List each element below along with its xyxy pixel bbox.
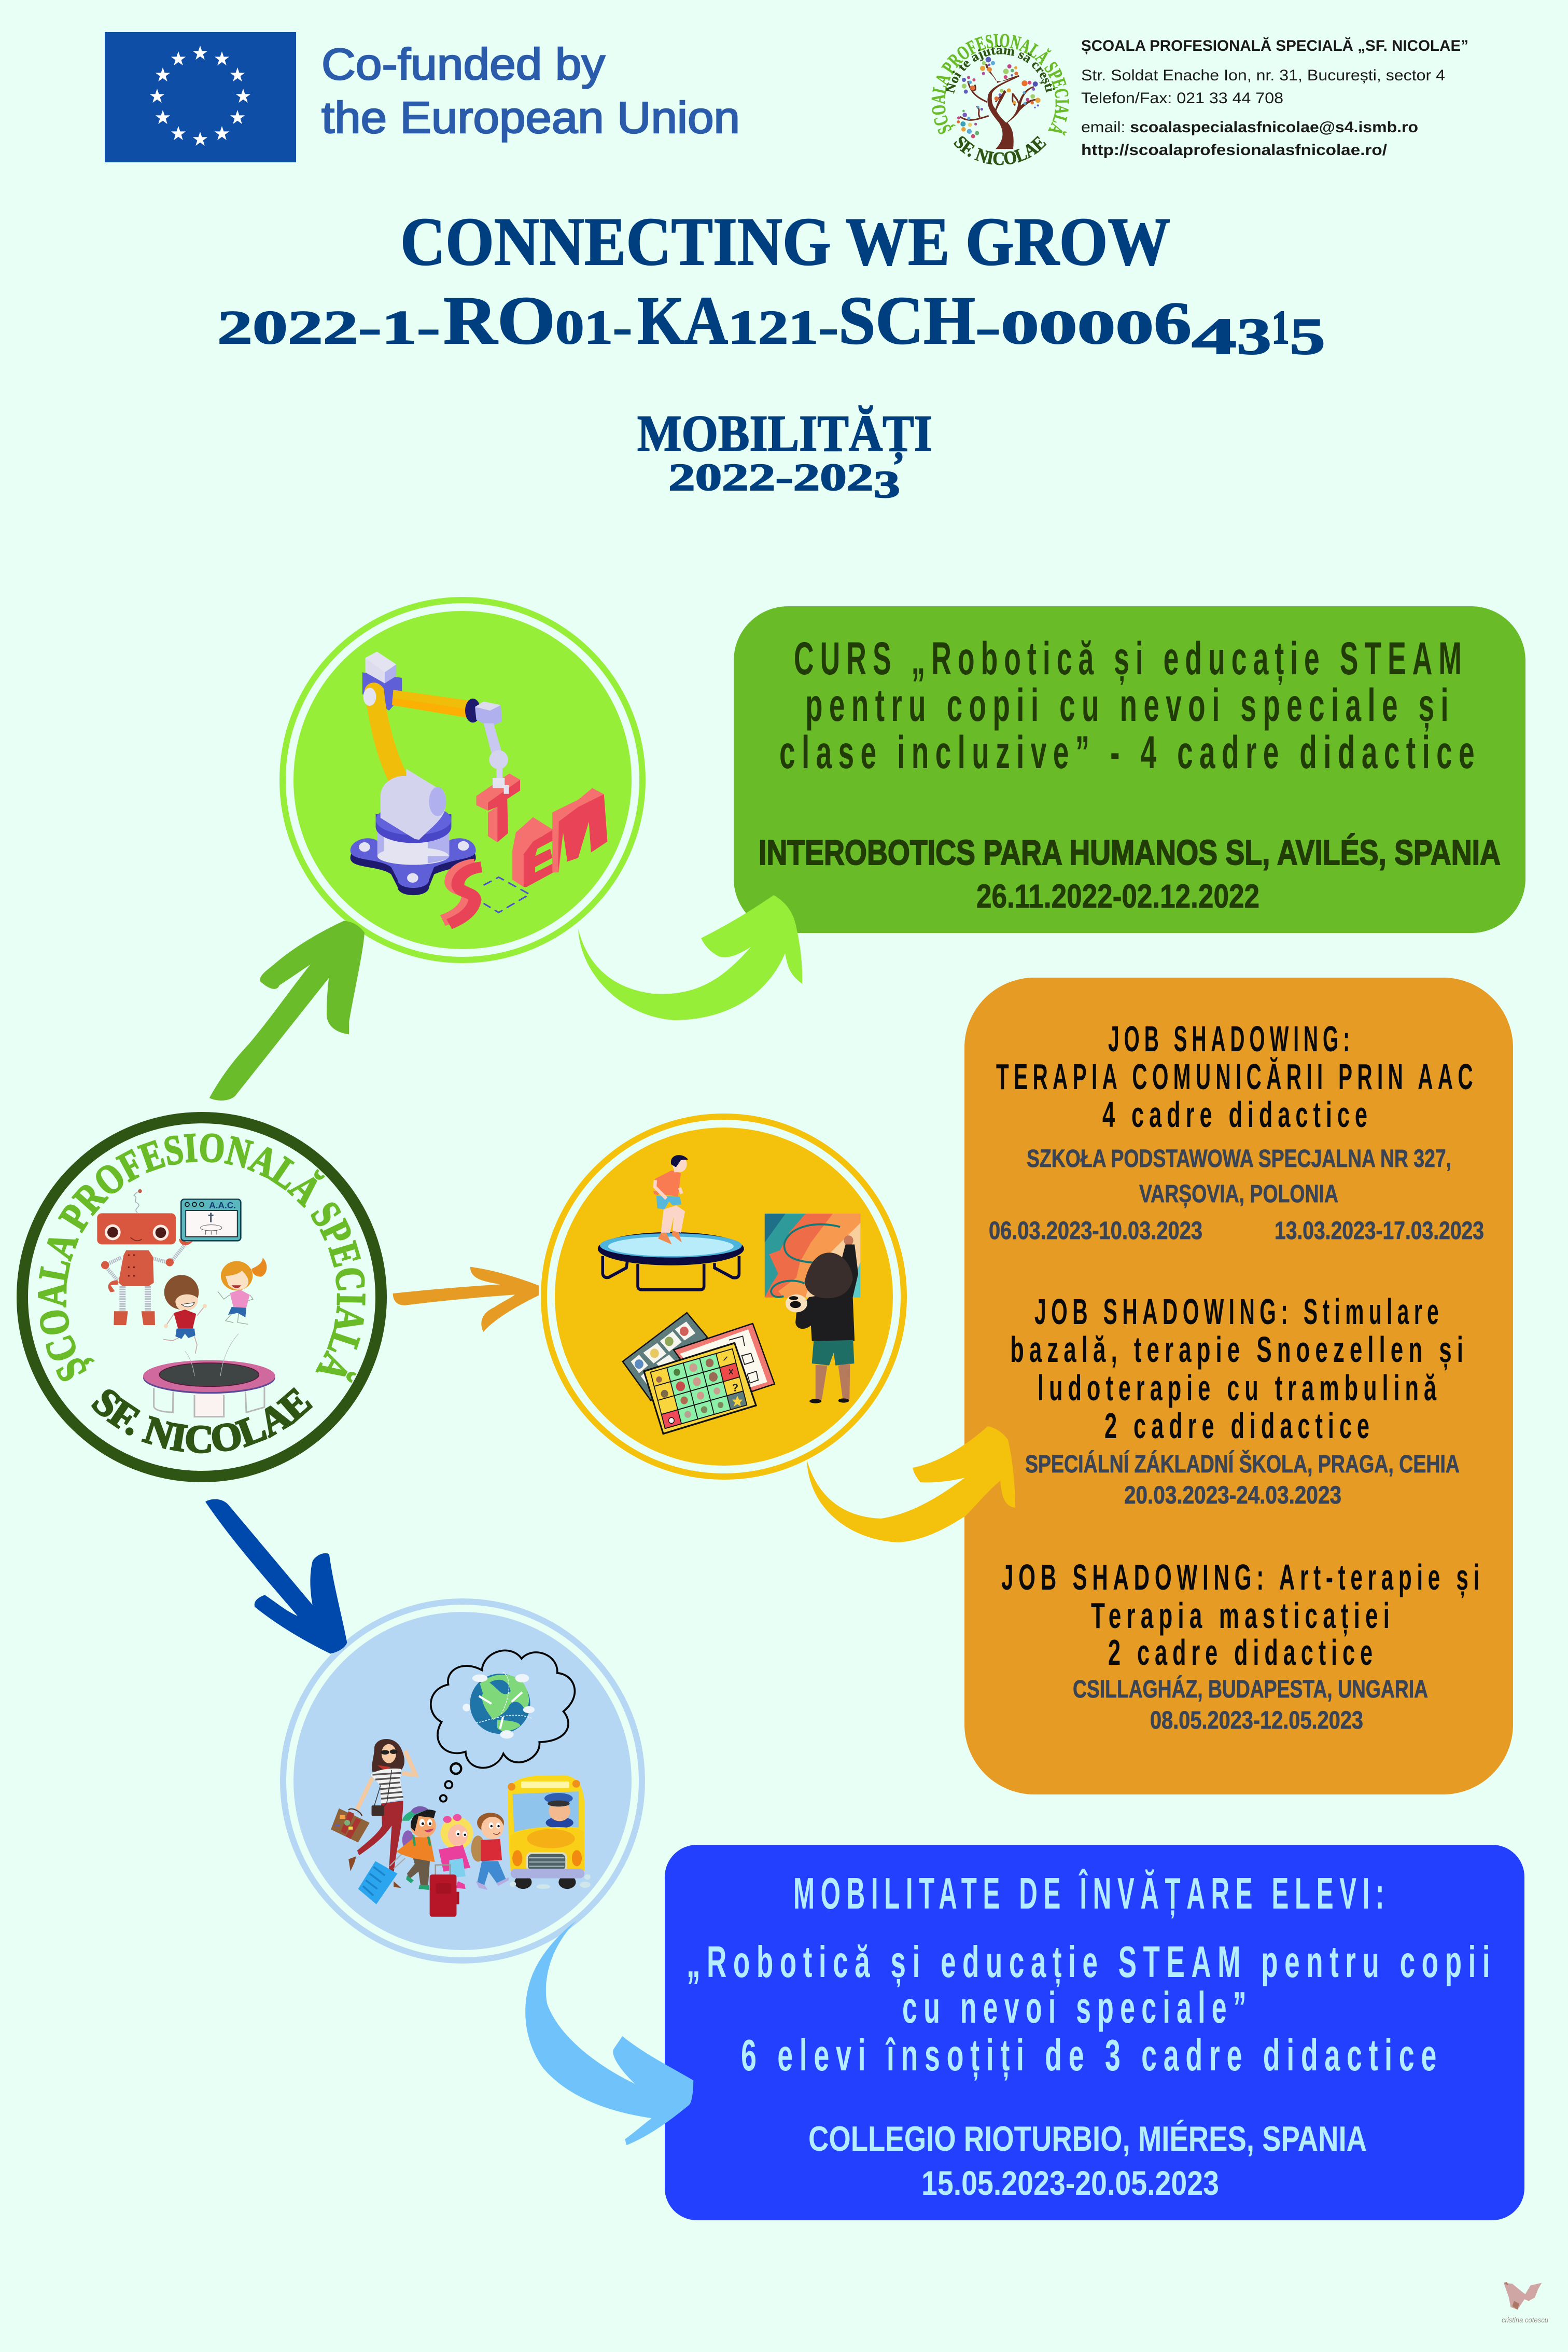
arrow: travel circle to student panel xyxy=(525,1920,693,2145)
job shadowing 1: VARȘOVIA, POLONIA xyxy=(1139,1180,1338,1208)
blue suitcase xyxy=(390,1855,405,1869)
boy with cap xyxy=(407,1857,430,1885)
emblem text: school name: ȘCOALA PROFESIONALĂ SPECIALĂ xyxy=(37,1133,366,1383)
job shadowing 1: 13.03.2023-17.03.2023 xyxy=(1275,1217,1484,1245)
title: -0000 xyxy=(975,301,1154,354)
title: 5 xyxy=(1290,308,1325,365)
job shadowing 1: JOB SHADOWING: xyxy=(1108,1019,1354,1059)
designer mark xyxy=(1502,2282,1548,2324)
icon: robot arm and STEM letters xyxy=(351,651,607,924)
course host and dates xyxy=(759,833,1501,915)
job shadowing 1 xyxy=(989,1019,1484,1245)
title xyxy=(217,203,1325,365)
EU co-funding text: Co-funded by xyxy=(321,40,606,89)
job shadowing 3: 2 cadre didactice xyxy=(1108,1632,1378,1673)
job shadowing 3 xyxy=(1001,1557,1485,1734)
panel: robotics course xyxy=(734,606,1525,933)
school bus xyxy=(514,1875,532,1889)
panel: student mobility xyxy=(665,1845,1524,2220)
job shadowing 3: 08.05.2023-12.05.2023 xyxy=(1150,1707,1363,1734)
arrow: emblem to job shadowing circle xyxy=(393,1267,539,1332)
course description xyxy=(779,632,1481,778)
student mobility description: cu nevoi speciale” xyxy=(902,1983,1253,2033)
title: 4 xyxy=(1192,308,1237,365)
AAC boards xyxy=(623,1313,707,1400)
school contact details: email: scoalaspecialasfnicolae@s4.ismb.ro xyxy=(1081,119,1418,136)
icon: robot, children and trampoline: A.A.C. xyxy=(209,1200,236,1210)
icon: butterfly xyxy=(1504,2282,1542,2309)
icon: robot, children and trampoline xyxy=(97,1189,275,1417)
girl xyxy=(218,1291,253,1324)
icon: travellers and school bus xyxy=(331,1650,591,1917)
job shadowing 2: 2 cadre didactice xyxy=(1104,1405,1375,1446)
circle: STEM robot xyxy=(283,600,642,960)
title: RO xyxy=(443,282,555,358)
school contact details: Str. Soldat Enache Ion, nr. 31, București, sector 4 xyxy=(1081,67,1445,84)
EU flag xyxy=(105,32,296,162)
red suitcase xyxy=(436,1865,450,1874)
arrow: emblem to STEM xyxy=(209,921,365,1101)
title: 121- xyxy=(728,301,838,354)
job shadowing 1: 06.03.2023-10.03.2023 xyxy=(989,1217,1202,1245)
school contact details: ȘCOALA PROFESIONALĂ SPECIALĂ „SF. NICOLAE” xyxy=(1081,37,1468,54)
job shadowing 1: SZKOŁA PODSTAWOWA SPECJALNA NR 327, xyxy=(1027,1145,1451,1173)
title: 2022-1- xyxy=(217,301,440,354)
emblem text: SF. NICOLAE: SF. NICOLAE xyxy=(91,1387,313,1453)
school contact details: http://scoalaprofesionalasfnicolae.ro/ xyxy=(1081,142,1388,159)
icon: trampoline, painter and AAC boards xyxy=(598,1155,860,1434)
boy xyxy=(163,1306,205,1354)
school contact details: Telefon/Fax: 021 33 44 708 xyxy=(1081,90,1283,107)
heading: mobilities xyxy=(637,405,932,506)
title: 01- xyxy=(555,301,632,354)
circle: job shadowing themes xyxy=(544,1117,904,1477)
student mobility host and dates: COLLEGIO RIOTURBIO, MIÉRES, SPANIA xyxy=(808,2119,1367,2159)
trampoline xyxy=(603,1256,739,1290)
robot xyxy=(134,1191,140,1213)
circle: student travel xyxy=(283,1602,642,1960)
job shadowing 1: 4 cadre didactice xyxy=(1102,1094,1373,1135)
icon: trampoline, painter and AAC boards: ? xyxy=(732,1382,738,1394)
student mobility host and dates xyxy=(808,2119,1367,2202)
boy with backpack xyxy=(477,1861,507,1887)
icon: tree with hands xyxy=(957,57,1041,149)
student mobility host and dates: 15.05.2023-20.05.2023 xyxy=(921,2164,1219,2202)
course host and dates: 26.11.2022-02.12.2022 xyxy=(976,878,1259,915)
EU logo xyxy=(105,32,740,162)
trampoline xyxy=(194,1394,224,1417)
jumping boy xyxy=(658,1230,682,1244)
painting xyxy=(765,1214,860,1298)
panel: job shadowing xyxy=(964,978,1513,1794)
job shadowing 2: SPECIÁLNÍ ZÁKLADNÍ ŠKOLA, PRAGA, CEHIA xyxy=(1025,1450,1460,1478)
globe xyxy=(470,1674,530,1734)
EU co-funding text xyxy=(321,40,740,143)
title: KA xyxy=(637,282,728,358)
arrow: emblem to travel circle xyxy=(205,1499,347,1654)
title: 6 xyxy=(1154,290,1192,357)
school logo small: ȘCOALA PROFESIONALĂ SPECIALĂ xyxy=(931,34,1069,136)
job shadowing 2 xyxy=(1010,1291,1468,1509)
girl with bow xyxy=(456,1881,466,1889)
job shadowing 3: Terapia masticației xyxy=(1091,1595,1395,1636)
heading: mobilities: 2022-202 xyxy=(668,456,816,499)
painter xyxy=(844,1235,853,1246)
arrow: STEM to course panel xyxy=(578,895,802,1020)
thought cloud xyxy=(431,1650,575,1768)
circle: school emblem xyxy=(17,1112,387,1482)
school logo small: SF. NICOLAE xyxy=(954,136,1046,165)
arrow: job shadowing circle to panel xyxy=(807,1426,1015,1542)
student mobility description xyxy=(687,1869,1496,2081)
title: CONNECTING WE GROW xyxy=(400,203,1170,280)
job shadowing 2: 20.03.2023-24.03.2023 xyxy=(1124,1482,1341,1509)
designer mark: cristina cotescu xyxy=(1502,2316,1548,2324)
title: 3 xyxy=(1237,308,1271,365)
EU co-funding text: the European Union xyxy=(321,93,740,143)
heading: mobilities: MOBILITĂȚI xyxy=(637,405,932,464)
woman xyxy=(357,1801,403,1875)
title: 1 xyxy=(1271,301,1290,354)
school contact details xyxy=(1081,37,1468,159)
job shadowing 3: CSILLAGHÁZ, BUDAPESTA, UNGARIA xyxy=(1073,1675,1428,1703)
heading: mobilities: 3 xyxy=(873,464,900,506)
A.A.C. board xyxy=(181,1199,241,1241)
title: SCH xyxy=(838,282,975,358)
